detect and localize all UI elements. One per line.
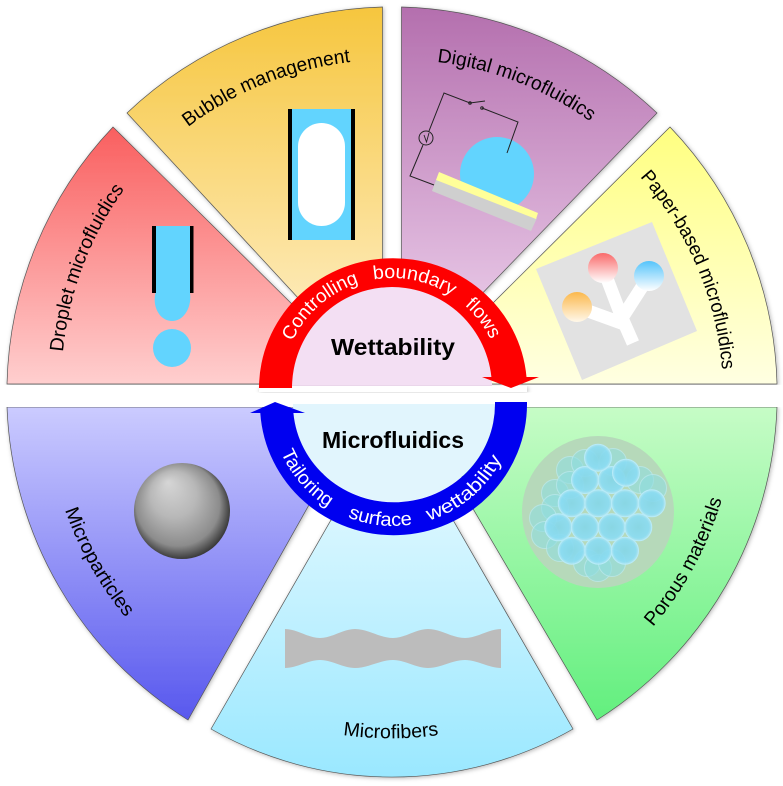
icon: paper device xyxy=(536,222,697,380)
centre: wettability half xyxy=(292,285,492,386)
centre: microfluidics half xyxy=(293,404,495,502)
label: porous materials: Porous materials xyxy=(644,498,721,626)
panel: porous materials xyxy=(461,407,780,722)
centre divider band xyxy=(0,385,783,407)
label: digital microfluidics: Digital microfluidics xyxy=(438,48,594,120)
arrow label: boundary: boundary xyxy=(373,265,457,296)
heading: microfluidics: Microfluidics xyxy=(322,427,464,453)
icon: bubble in channel xyxy=(288,109,355,240)
heading: wettability: Wettability xyxy=(331,334,455,360)
arrow: controlling boundary flows xyxy=(259,258,539,388)
icon: sphere xyxy=(134,463,230,559)
label: microfibers: Microfibers xyxy=(344,722,438,738)
icon: porous structure xyxy=(522,436,674,588)
arrow label: tailoring: Tailoring xyxy=(283,447,333,508)
label: bubble management: Bubble management xyxy=(181,50,350,126)
arrow label: wettability: wettability xyxy=(425,454,502,520)
icon: electrowetting droplet and circuit xyxy=(410,93,538,231)
label: microparticles: Microparticles xyxy=(66,506,132,616)
arrow label: controlling: Controlling xyxy=(283,274,358,338)
arrow label: flows: flows xyxy=(466,297,498,338)
panel: digital microfluidics xyxy=(400,6,660,295)
icon: droplet in channel xyxy=(152,226,194,367)
label: droplet microfluidics: Droplet microfluidics xyxy=(50,185,123,350)
panel: droplet microfluidics xyxy=(6,126,293,385)
panel: microparticles xyxy=(6,407,326,722)
panel: paper-based microfluidics xyxy=(492,126,780,385)
panel: bubble management xyxy=(126,6,386,299)
label: paper-based microfluidics: Paper-based microfluidics xyxy=(641,169,734,369)
centre: white lens shadow band xyxy=(259,386,527,392)
icon: wavy fiber xyxy=(285,629,501,668)
arrow label: surface: surface xyxy=(348,508,411,526)
panel: microfibers xyxy=(210,520,576,781)
arrow: tailoring surface wettability xyxy=(250,402,527,536)
